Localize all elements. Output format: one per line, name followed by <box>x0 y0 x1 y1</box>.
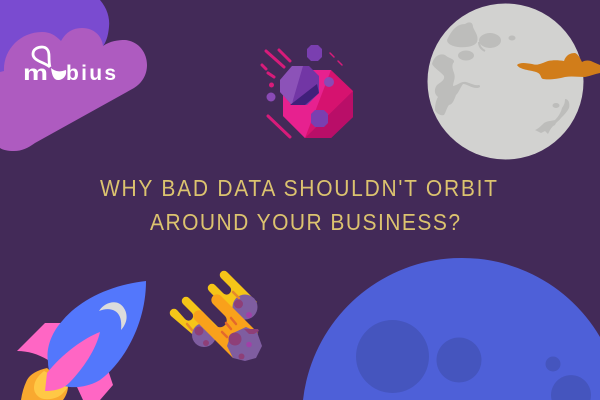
title line 2: AROUND YOUR BUSINESS? <box>150 209 460 235</box>
purple rock dark facet <box>290 84 319 105</box>
rocket body <box>48 281 146 387</box>
orange meteor tail <box>193 294 258 358</box>
title line 1: WHY BAD DATA SHOULDN'T ORBIT <box>100 175 497 201</box>
right yellow meteor tail <box>208 271 257 321</box>
purple rock light facet <box>280 66 303 105</box>
logo swirl <box>51 68 66 80</box>
left meteor crater <box>194 326 204 336</box>
small debris dots <box>269 82 274 88</box>
orange meteor rock <box>227 327 262 361</box>
right meteor small crater <box>246 312 252 318</box>
orange meteor large crater <box>228 332 242 346</box>
title <box>100 175 497 235</box>
flame outer <box>21 368 68 400</box>
left fin <box>17 323 66 360</box>
cloud: dark violet back <box>0 0 109 75</box>
moon crater patches <box>432 22 569 134</box>
rocket stripe <box>45 332 100 391</box>
cloud: light purple front <box>0 28 147 151</box>
right meteor crater <box>234 300 243 308</box>
right fin <box>77 370 113 400</box>
logo: mobius <box>23 47 116 85</box>
rocket <box>17 281 146 400</box>
crater lower <box>311 110 328 127</box>
left yellow meteor tail <box>170 297 218 345</box>
meteor streaks <box>222 318 236 337</box>
logo loop mark <box>33 47 50 67</box>
orange cloud streak <box>517 53 600 79</box>
asteroid illustration <box>262 45 353 138</box>
meteors <box>170 271 262 361</box>
planet craters <box>356 320 591 400</box>
large pink rock <box>283 70 353 138</box>
logo wordmark left: m <box>23 62 48 85</box>
small purple satellite <box>307 45 322 61</box>
left meteor rock <box>192 323 216 347</box>
logo wordmark right: bius <box>66 62 116 85</box>
right meteor rock <box>232 294 258 320</box>
big blue planet <box>303 258 600 400</box>
purple rock <box>280 66 319 105</box>
moon <box>428 4 600 160</box>
speed streaks <box>262 50 342 137</box>
orange meteor bottom crater <box>238 354 244 360</box>
left meteor small crater <box>203 340 209 346</box>
flame inner <box>34 371 68 399</box>
orange meteor top crater <box>244 329 259 334</box>
rocket window crescent <box>99 302 127 330</box>
crater right <box>324 77 334 87</box>
orange meteor right crater <box>246 342 252 347</box>
